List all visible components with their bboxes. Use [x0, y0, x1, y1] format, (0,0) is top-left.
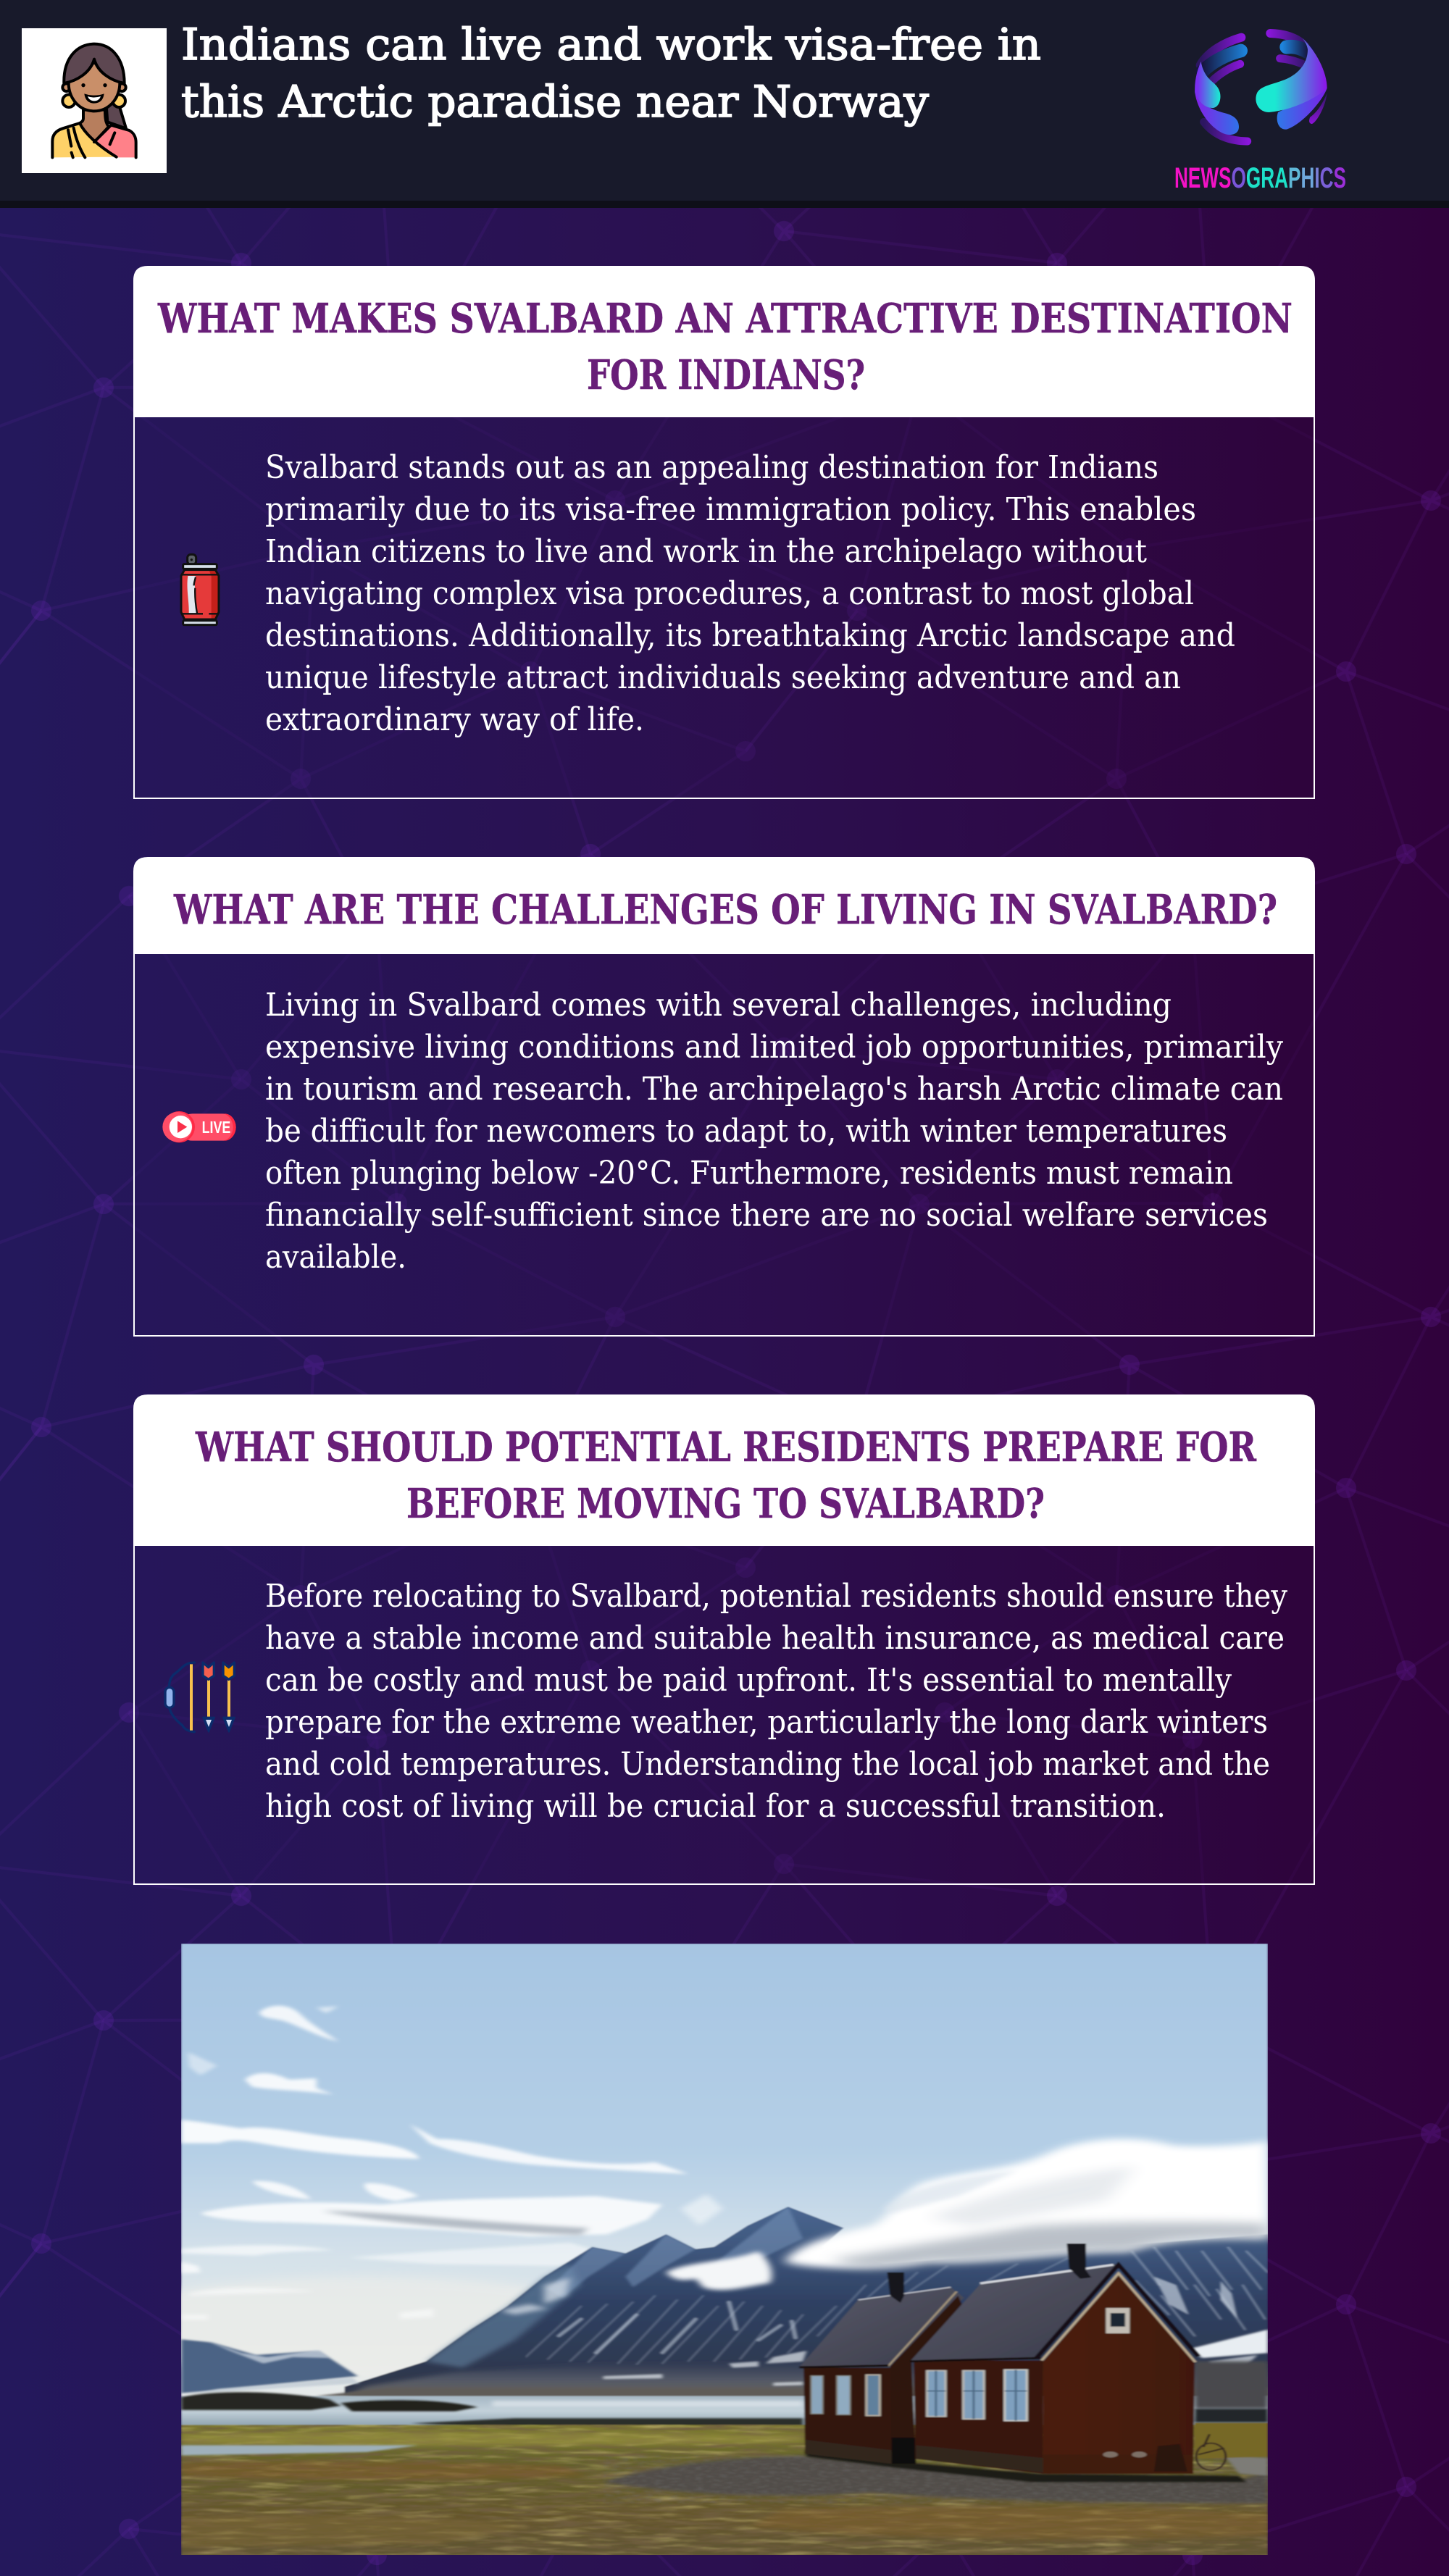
body text [265, 987, 1283, 1276]
body text: Before relocating to Svalbard, potential residents should ensure they [265, 1578, 1287, 1615]
icon: woman avatar [22, 28, 167, 173]
body text: in tourism and research. The archipelago's harsh Arctic climate can [265, 1071, 1283, 1108]
logo: Newsographics [1195, 33, 1327, 141]
right wall [914, 2361, 1043, 2474]
body text: extraordinary way of life. [265, 701, 644, 738]
body text: be difficult for newcomers to adapt to, with winter temperatures [265, 1113, 1227, 1150]
left roof [799, 2287, 964, 2367]
big cloud [785, 2138, 1268, 2268]
icon: soda can [181, 554, 219, 625]
chimneys [1066, 2243, 1091, 2279]
cabins [799, 2243, 1226, 2474]
snow gullies [526, 2247, 1268, 2364]
left wall [803, 2367, 893, 2464]
body text: Svalbard stands out as an appealing destination for Indians [265, 449, 1158, 486]
title [181, 20, 1041, 127]
heading [133, 1394, 1315, 1546]
main mountain range [345, 2207, 1268, 2395]
body text: and cold temperatures. Understanding the local job market and the [265, 1746, 1270, 1783]
valley floor [345, 2362, 1268, 2397]
body text: often plunging below -20°C. Furthermore, residents must remain [265, 1155, 1233, 1192]
title: this Arctic paradise near Norway [181, 77, 929, 127]
panel: preparation [133, 1394, 1315, 1884]
panel: challenges [133, 857, 1315, 1336]
body text: navigating complex visa procedures, a contrast to most global [265, 575, 1194, 612]
right distant land [1195, 2362, 1268, 2409]
body text: can be costly and must be paid upfront. It's essential to mentally [265, 1662, 1232, 1699]
heading [133, 266, 1315, 417]
body text: high cost of living will be crucial for a successful transition. [265, 1788, 1166, 1825]
hazy west flank [426, 2264, 581, 2367]
icon: live badge: LIVE [202, 1118, 230, 1137]
icon: live badge [162, 1111, 236, 1142]
body text: prepare for the extreme weather, particularly the long dark winters [265, 1704, 1268, 1741]
body text: Indian citizens to live and work in the archipelago without [265, 533, 1147, 570]
body text: available. [265, 1239, 406, 1276]
bike and stools [1198, 2434, 1224, 2454]
logo wordmark: NEWSOGRAPHICS [1174, 162, 1346, 194]
body text: have a stable income and suitable health insurance, as medical care [265, 1620, 1285, 1657]
gable end [1043, 2275, 1195, 2474]
gravel [604, 2456, 1268, 2504]
small cloud [666, 2251, 772, 2290]
clouds left [181, 2006, 723, 2320]
icon: bow and arrows [165, 1663, 235, 1732]
body text [265, 449, 1235, 738]
body text: primarily due to its visa-free immigration policy. This enables [265, 491, 1196, 528]
heading: BEFORE MOVING TO SVALBARD? [406, 1480, 1045, 1528]
title: Indians can live and work visa-free in [181, 20, 1041, 70]
heading: WHAT SHOULD POTENTIAL RESIDENTS PREPARE FOR [195, 1423, 1256, 1471]
islands [181, 2392, 341, 2410]
photo: red cabins below Arctic mountains [181, 1944, 1268, 2555]
body text: destinations. Additionally, its breathtaking Arctic landscape and [265, 617, 1235, 654]
panel: attractive destination [133, 266, 1315, 798]
tundra [181, 2425, 1268, 2556]
body text [265, 1578, 1287, 1825]
heading [133, 857, 1315, 954]
body text: financially self-sufficient since there are no social welfare services [265, 1197, 1268, 1234]
far snow patch [1191, 2330, 1268, 2358]
causeway [411, 2418, 803, 2428]
heading: FOR INDIANS? [587, 351, 865, 399]
middle entry [890, 2296, 962, 2464]
header bar [0, 0, 1449, 208]
body text: Living in Svalbard comes with several challenges, including [265, 987, 1172, 1024]
water [181, 2396, 1268, 2426]
right roof [910, 2264, 1117, 2362]
body text: unique lifestyle attract individuals seeking adventure and an [265, 659, 1181, 696]
left distant mountain [181, 2339, 358, 2393]
body text: expensive living conditions and limited job opportunities, primarily [265, 1029, 1283, 1066]
